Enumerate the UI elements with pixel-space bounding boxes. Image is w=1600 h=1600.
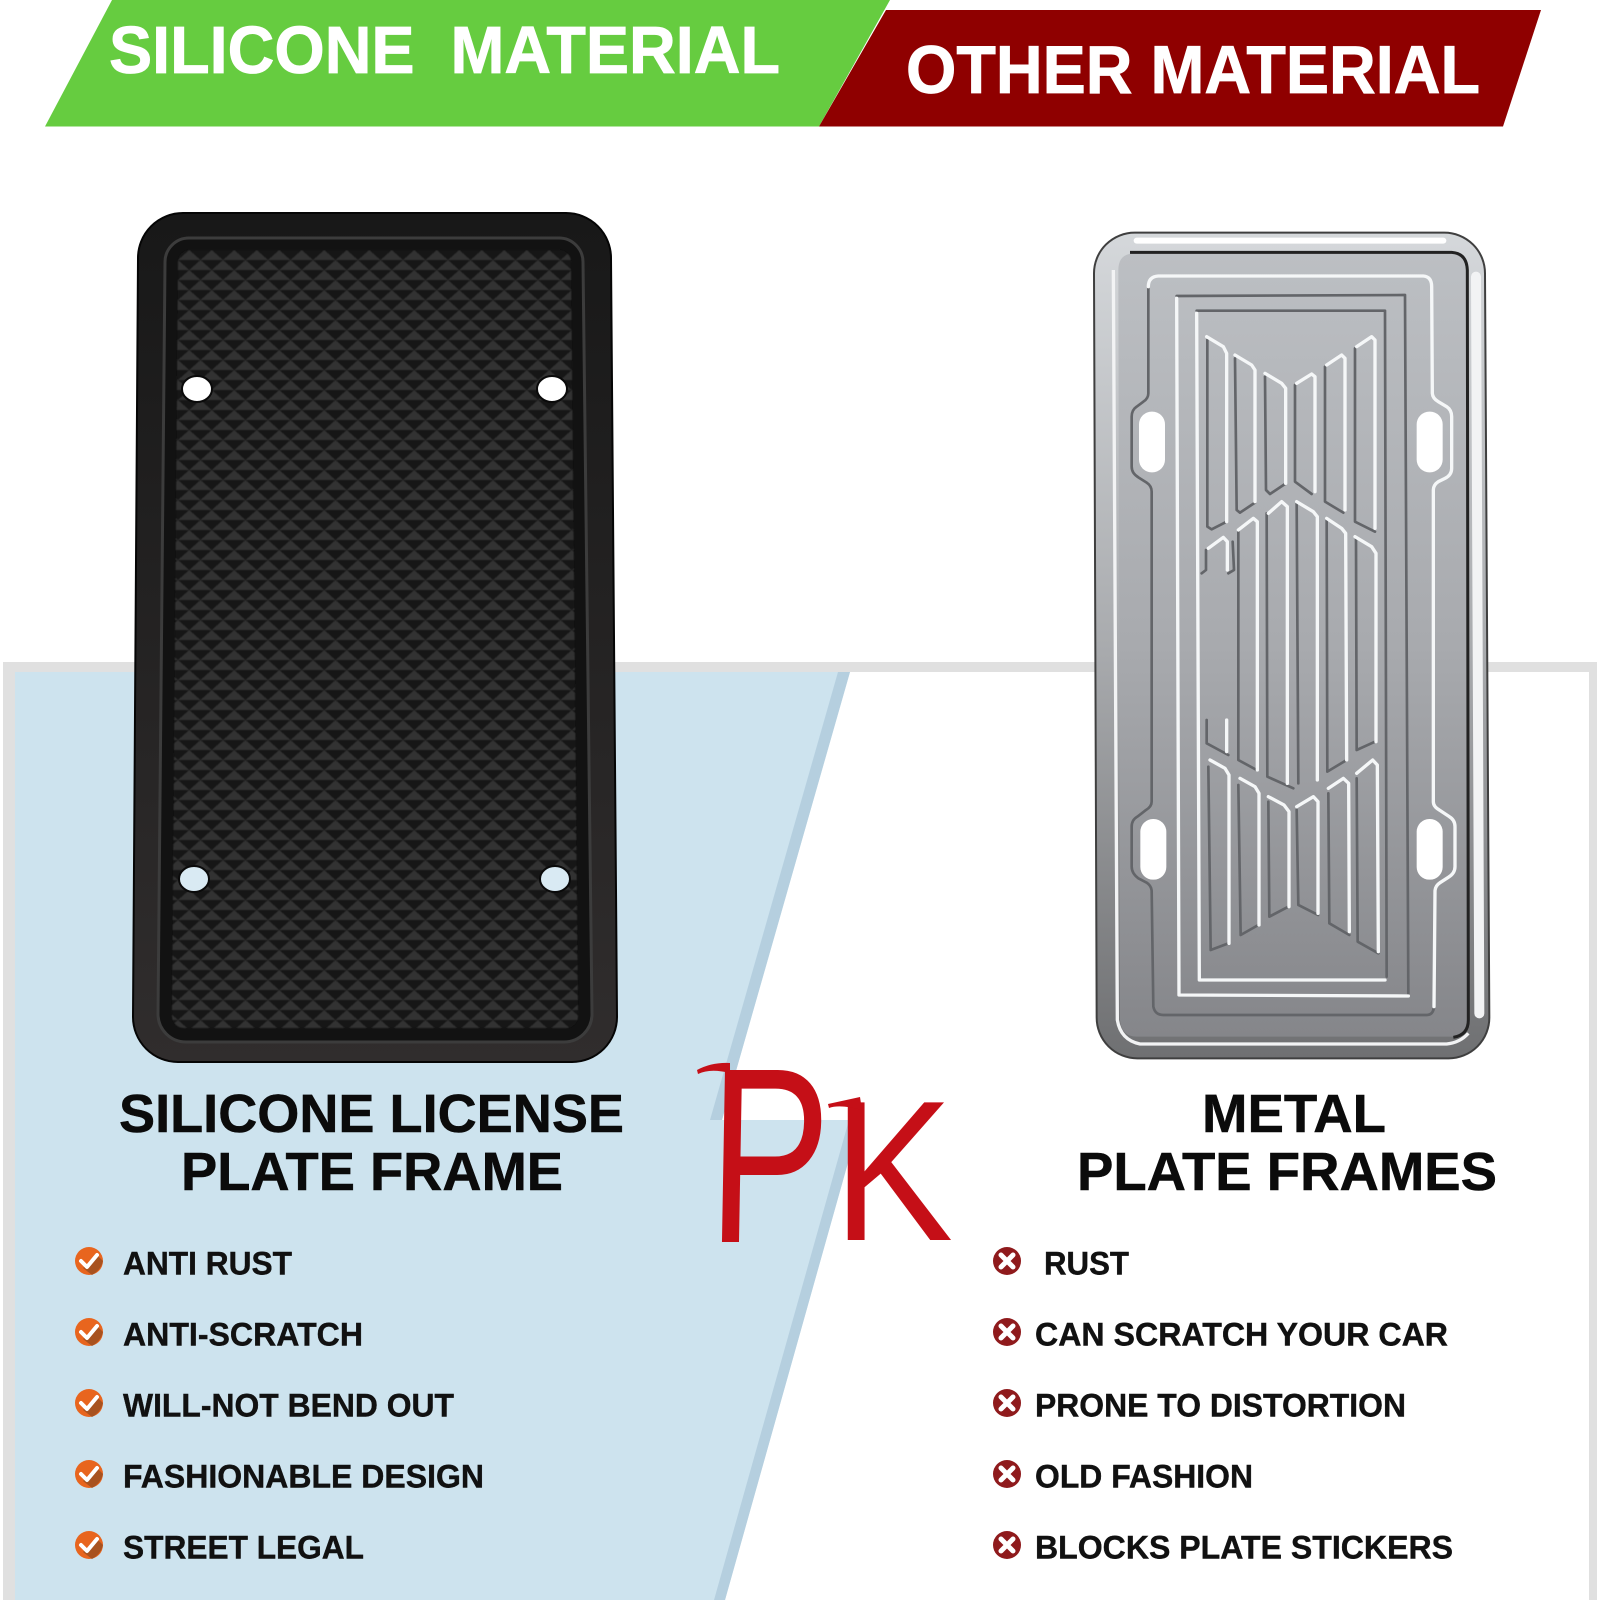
banner: other material	[819, 10, 1541, 126]
heading: metal plate frames: METAL	[1202, 1084, 1386, 1144]
list item: rust: RUST	[1044, 1246, 1129, 1282]
list item: anti-scratch: ANTI-SCRATCH	[123, 1316, 363, 1352]
list item: can scratch your car: CAN SCRATCH YOUR CAR	[1035, 1316, 1448, 1352]
product image: black silicone license plate frame	[133, 213, 617, 1062]
list item: anti rust: ANTI RUST	[123, 1246, 292, 1282]
versus mark: PK: K	[833, 1060, 953, 1283]
heading: metal plate frames	[1077, 1084, 1497, 1202]
list item: fashionable design: FASHIONABLE DESIGN	[123, 1458, 484, 1494]
heading: silicone license plate frame: SILICONE LICENSE	[119, 1084, 624, 1144]
list: metal drawbacks	[993, 1246, 1453, 1566]
list item: rust	[993, 1246, 1129, 1282]
banner: silicone material	[45, 0, 890, 126]
list: silicone benefits	[75, 1246, 484, 1566]
product image: metal plate frame	[1094, 233, 1489, 1058]
list item: old fashion: OLD FASHION	[1035, 1458, 1253, 1494]
list item: will-not bend out: WILL-NOT BEND OUT	[123, 1388, 454, 1424]
list item: street legal: STREET LEGAL	[123, 1530, 364, 1566]
heading: silicone license plate frame	[119, 1084, 624, 1202]
panel: comparison backdrop	[3, 662, 1597, 1600]
panel: light blue silicone side	[15, 672, 860, 1600]
list item: blocks plate stickers: BLOCKS PLATE STICKERS	[1035, 1530, 1453, 1566]
versus mark: PK: P	[706, 1017, 833, 1296]
banner heading: silicone material: SILICONE MATERIAL	[109, 13, 780, 88]
heading: silicone license plate frame: PLATE FRAME	[181, 1142, 563, 1202]
versus mark: PK	[697, 1017, 953, 1296]
banner heading: other material: OTHER MATERIAL	[906, 32, 1480, 108]
heading: metal plate frames: PLATE FRAMES	[1077, 1142, 1497, 1202]
list item: prone to distortion: PRONE TO DISTORTION	[1035, 1388, 1406, 1424]
